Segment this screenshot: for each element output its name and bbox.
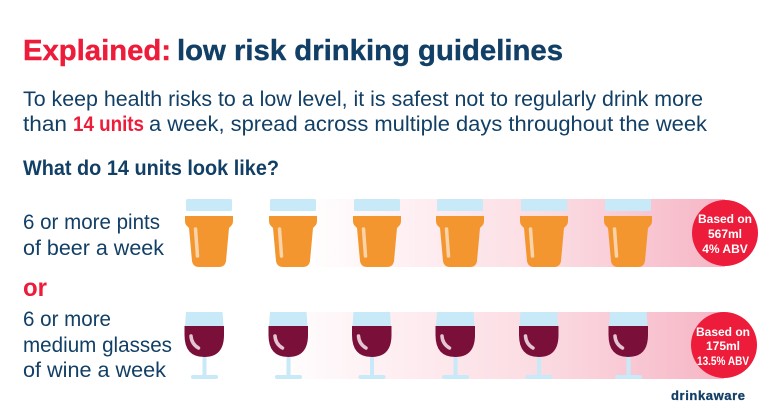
- icon: pint 3: [353, 199, 401, 267]
- beer callout: 567ml: [708, 227, 742, 241]
- icon: wine 1: [184, 312, 224, 379]
- subheading: What do 14 units look like?: [23, 157, 279, 180]
- icon: wine 6: [608, 312, 648, 379]
- intro paragraph: 14 units: [73, 112, 144, 136]
- beer callout: [692, 200, 758, 266]
- icon: wine 4: [436, 312, 475, 379]
- wine callout: 175ml: [706, 339, 740, 353]
- wine label: 6 or more: [23, 308, 111, 331]
- icon: wine 3: [352, 312, 392, 379]
- title: low risk drinking guidelines: [177, 35, 563, 67]
- intro paragraph: To keep health risks to a low level, it is safest not to regularly drink more: [23, 87, 703, 111]
- or: or: [23, 274, 47, 302]
- icon: pint 5: [520, 199, 568, 267]
- beer label: 6 or more pints: [23, 211, 160, 234]
- wine label: [23, 308, 172, 382]
- icon: wine 5: [519, 312, 558, 379]
- beer callout: 4% ABV: [702, 242, 748, 256]
- title: Explained:: [23, 35, 171, 67]
- intro paragraph: [23, 87, 707, 136]
- wine label: of wine a week: [23, 359, 167, 382]
- intro paragraph: than: [23, 112, 67, 136]
- wine callout: 13.5% ABV: [697, 354, 749, 368]
- icon: pint 6: [604, 199, 652, 267]
- intro paragraph: a week, spread across multiple days throughout the week: [149, 112, 707, 136]
- logo: drinkaware: [671, 388, 745, 403]
- icon: pint 2: [269, 199, 317, 267]
- beer label: [23, 211, 164, 260]
- wine label: medium glasses: [23, 334, 172, 357]
- wine callout: Based on: [696, 325, 750, 339]
- icon: pint 1: [185, 199, 233, 267]
- icon: wine 2: [268, 312, 308, 379]
- beer row band: [300, 199, 725, 267]
- wine glasses: [184, 312, 648, 379]
- beer label: of beer a week: [23, 237, 164, 260]
- beer callout: Based on: [698, 212, 752, 226]
- beer glasses: [185, 199, 652, 267]
- icon: pint 4: [436, 199, 484, 267]
- wine callout: [691, 312, 757, 378]
- wine row band: [268, 312, 724, 379]
